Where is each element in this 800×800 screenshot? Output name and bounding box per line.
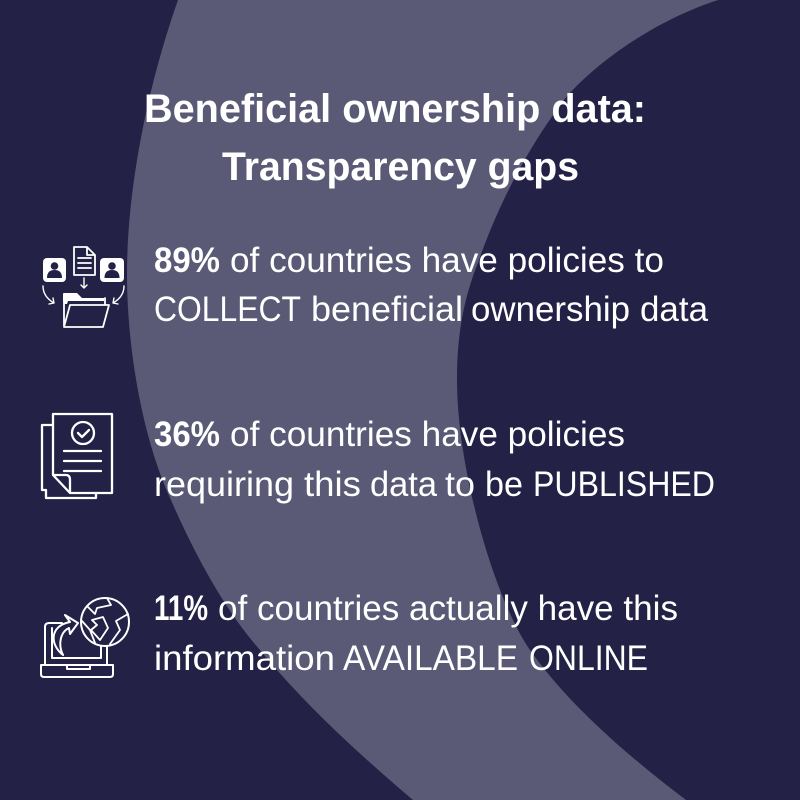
title — [144, 87, 646, 189]
statistic: 36% published: be — [485, 465, 523, 504]
icon: laptop with arrow and globe — [41, 598, 129, 677]
statistic: 11% available online: of countries actually have this — [218, 589, 678, 628]
statistic: 89% collect — [154, 241, 709, 329]
statistic: 36% published — [154, 415, 715, 504]
statistic: 36% published: to — [445, 465, 475, 504]
statistic: 89% collect: COLLECT — [154, 290, 301, 329]
statistic: 89% collect: 89% — [154, 241, 220, 280]
statistic: 89% collect: of countries have policies to — [230, 241, 664, 280]
title: Transparency gaps — [222, 145, 579, 189]
statistic: 36% published: of countries have policies — [230, 415, 625, 454]
icon: people and document into folder — [43, 247, 124, 327]
statistic: 36% published: PUBLISHED — [533, 465, 715, 504]
statistic: 89% collect: ownership — [471, 290, 630, 329]
statistic: 36% published: this — [304, 465, 361, 504]
statistic: 11% available online: AVAILABLE — [343, 639, 518, 678]
statistic: 89% collect: beneficial — [311, 290, 463, 329]
statistic: 11% available online: 11% — [154, 589, 208, 628]
statistic: 11% available online: information — [154, 639, 335, 678]
icon: checked document stack — [42, 414, 112, 498]
decorative crescent — [127, 0, 718, 800]
title: Beneficial ownership data: — [144, 87, 646, 131]
statistic: 36% published: 36% — [154, 415, 220, 454]
statistic: 11% available online — [154, 589, 678, 678]
statistic: 36% published: requiring — [154, 465, 294, 504]
statistic: 36% published: data — [370, 465, 438, 504]
statistic: 89% collect: data — [640, 290, 709, 329]
statistic: 11% available online: ONLINE — [529, 639, 648, 678]
